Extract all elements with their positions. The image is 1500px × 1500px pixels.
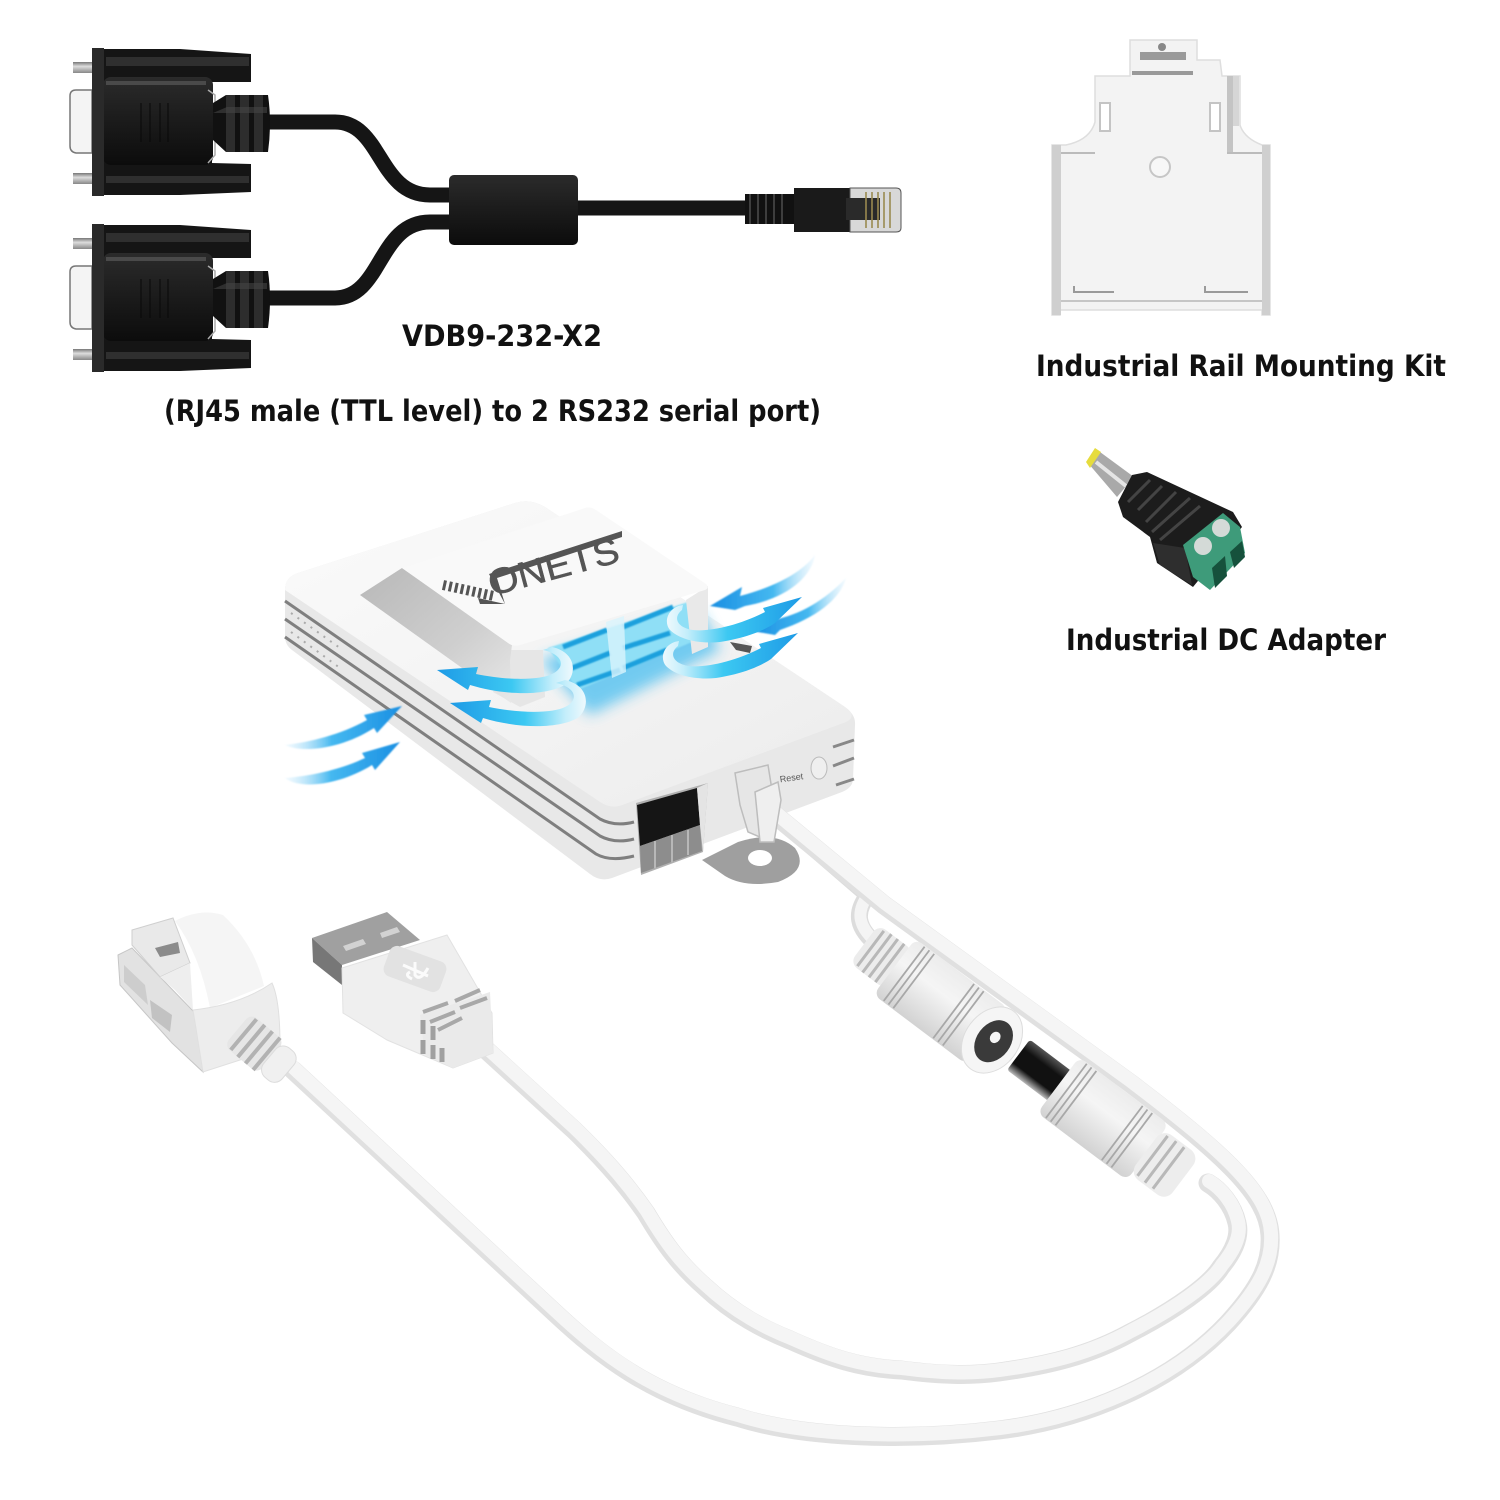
USB badge [381,944,449,994]
caption: cable description: (RJ45 male (TTL level) to 2 RS232 serial port) [164,394,821,428]
logo: Vonets [443,529,624,604]
arrow: right curl upper [667,597,802,642]
clear contact body [118,948,203,1072]
body grips [423,990,487,1030]
side vent dots [291,613,340,668]
device body [285,501,855,879]
panel: RS232 splitter cable [70,48,901,372]
right pillar [686,586,708,654]
arrow: upper right inlet [710,555,815,610]
fan housing [360,507,752,715]
RJ45 port [636,783,708,875]
top surface [285,501,852,807]
reset button [779,757,827,784]
clear latch [132,918,190,977]
surface glow [540,610,720,715]
icon: black RJ45 plug [745,188,901,232]
cable: RJ45 to device loop [293,813,1271,1436]
boot [193,983,280,1072]
cable splitter block [449,175,578,245]
housing top [402,507,708,646]
vent bars [563,607,673,685]
icon: top DB9 connector [70,48,270,196]
strain relief [224,1013,302,1088]
vent pillar [606,616,626,678]
right vent slots [833,740,854,785]
icon: male barrel plug [997,1027,1204,1207]
white latch tab [175,913,264,1008]
heading: rail mounting kit: Industrial Rail Mounting Kit [1036,349,1446,383]
arrow: upper left inlet [285,706,402,749]
logo: Vonets: ONETS [483,529,624,604]
arrow: right curl lower [663,633,798,678]
icon: DC terminal adapter [1086,448,1245,590]
cable: USB to barrel plug [483,1045,1239,1374]
USB symbol [403,962,428,979]
arrow: lower right inlet [752,578,846,635]
grey side wall [360,568,512,703]
heading: cable model: VDB9-232-X2 [402,319,602,353]
arrow: left curl upper [437,647,573,693]
arrow: lower left inlet [285,742,400,784]
icon: female barrel jack [843,915,1035,1085]
side vent grooves [285,601,634,859]
metal shell [312,912,420,965]
plug body [342,935,493,1068]
arrow: left curl lower [450,680,586,726]
heading: DC adapter: Industrial DC Adapter [1066,623,1387,657]
mounting ear with keyhole [702,837,800,884]
cable wires [265,122,750,298]
icon: white USB plug [312,912,493,1068]
housing leg [493,650,545,707]
icon: bottom DB9 connector [70,224,270,372]
small dark slot [730,642,752,653]
cable clip [735,765,781,842]
panel: white device with fan [285,501,855,879]
vent opening [548,602,692,690]
cable: thin lead to barrel jack [795,831,881,947]
icon: white RJ45 plug [118,913,302,1088]
white power and data cables [293,813,1271,1436]
grip face [420,992,493,1068]
airflow arrows [285,555,846,784]
panel: rail mounting kit [1052,40,1270,315]
reset button: Reset [779,771,804,784]
